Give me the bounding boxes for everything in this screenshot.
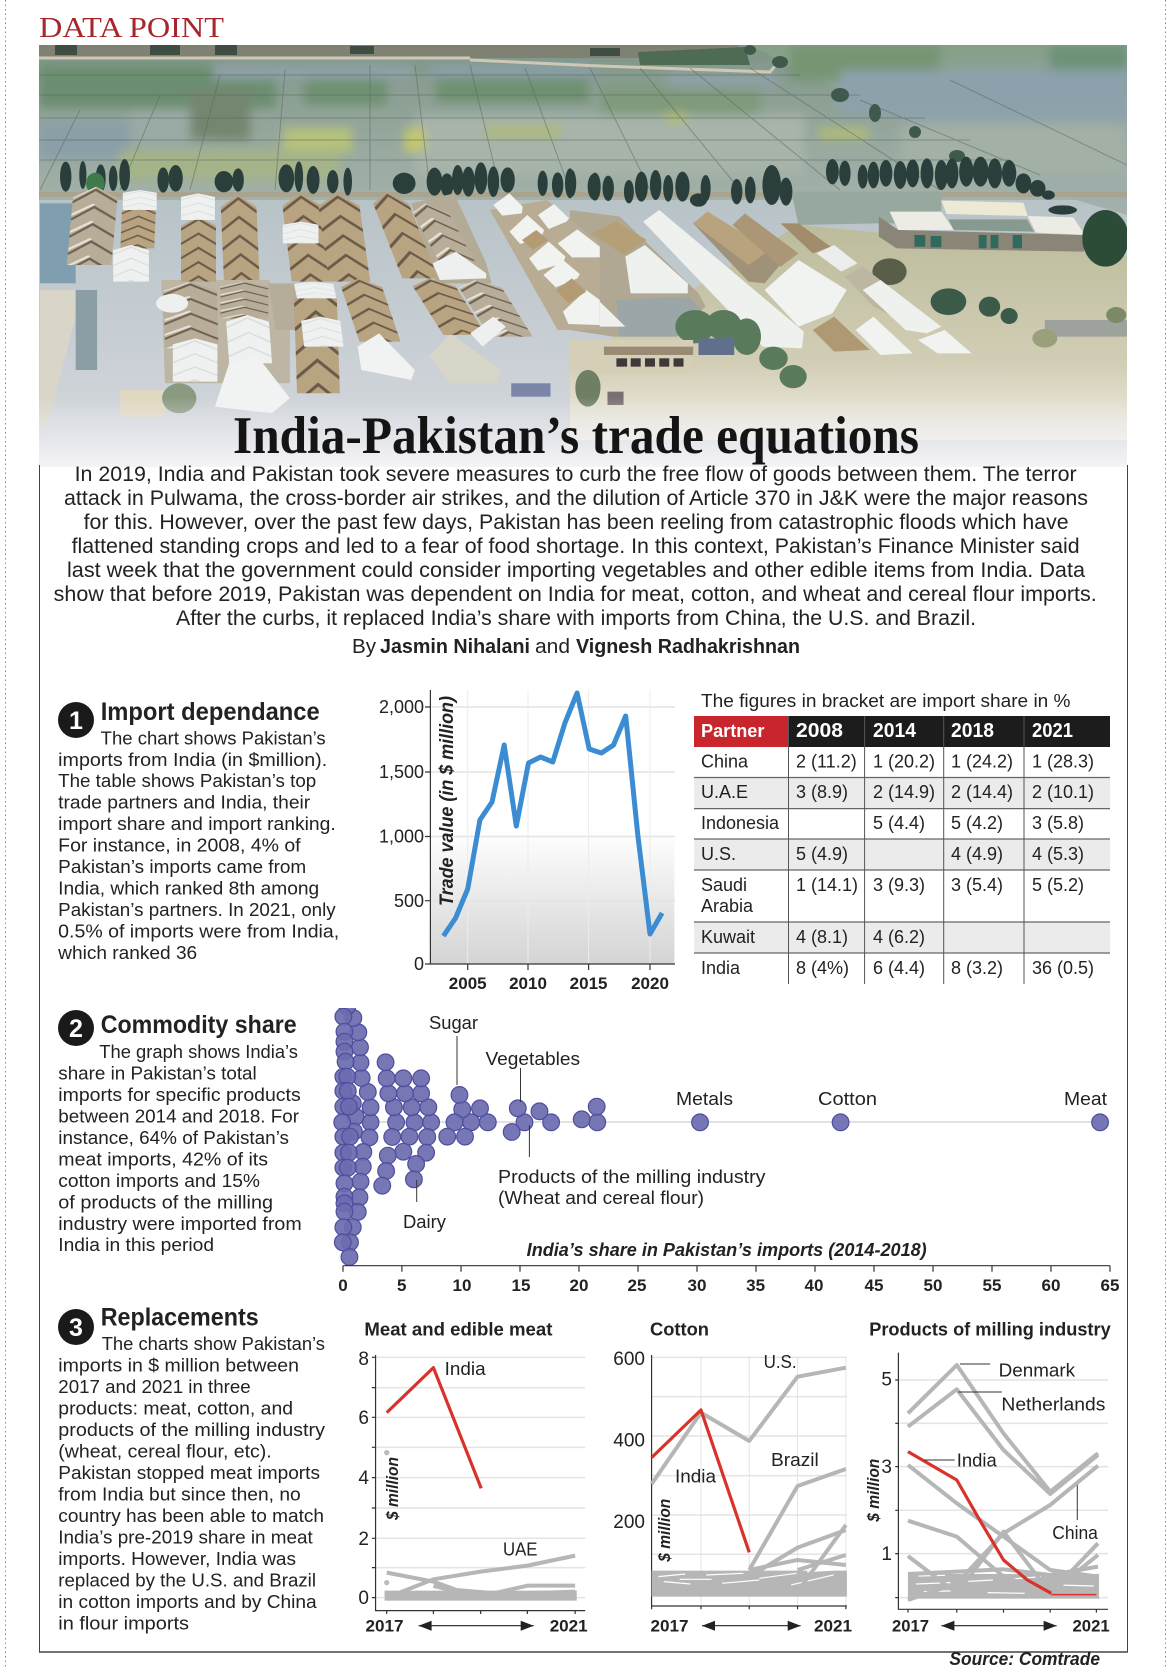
series labels: Netherlands (1001, 1394, 1105, 1415)
body text: imports from India (in $million). (58, 749, 327, 770)
body text: between 2014 and 2018. For (58, 1106, 299, 1126)
line chart: Pakistan's imports from India (379, 690, 675, 993)
leader lines (417, 1036, 529, 1202)
table rows: 5 (4.9) (796, 844, 848, 864)
number badge 2 (58, 1010, 94, 1046)
table rows (701, 752, 1094, 978)
table rows: 3 (9.3) (873, 875, 925, 895)
x axis labels: 30 (688, 1276, 706, 1295)
y axis labels (613, 1349, 645, 1533)
body text: industry were imported from (58, 1213, 302, 1234)
frame around article (39, 465, 1128, 1652)
data line (443, 693, 662, 936)
body text: The charts show Pakistan’s (102, 1333, 325, 1354)
body text: products: meat, cotton, and (58, 1398, 293, 1418)
x axis labels: 65 (1101, 1276, 1119, 1295)
intro paragraph: attack in Pulwama, the cross-border air strikes, and the dilution of Article 370 in J&K were the major reasons (64, 487, 1088, 510)
series labels: India (957, 1450, 998, 1471)
x axis labels: 0 (338, 1276, 348, 1295)
body text: imports for specific products (58, 1084, 301, 1105)
series labels (957, 1360, 1105, 1543)
y axis labels: 200 (613, 1512, 645, 1533)
callouts: Products of the milling industry (498, 1166, 766, 1187)
callouts: Sugar (429, 1012, 478, 1033)
series labels: China (1052, 1522, 1099, 1543)
table rows: 4 (5.3) (1032, 844, 1084, 864)
heading: Replacements: Replacements (101, 1304, 259, 1332)
plot lines (372, 1355, 585, 1614)
byline: By (352, 636, 376, 658)
y axis labels: 1 (881, 1544, 892, 1565)
body text: 0.5% of imports were from India, (58, 920, 339, 942)
x axis labels: 10 (453, 1276, 471, 1295)
year axis with arrow: 2021 (550, 1617, 588, 1636)
table rows: U.A.E (701, 782, 748, 802)
table rows: 2 (10.1) (1032, 782, 1094, 802)
x axis labels: 15 (512, 1276, 530, 1295)
table rows: 3 (8.9) (796, 782, 848, 802)
line chart: Meat and edible meat (358, 1319, 588, 1636)
callouts: Dairy (403, 1211, 447, 1232)
body text: Pakistan’s partners. In 2021, only (58, 899, 336, 920)
year axis with arrow: 2021 (814, 1617, 852, 1636)
callouts: Metals (676, 1088, 733, 1109)
byline (352, 636, 800, 658)
table rows: 3 (5.4) (951, 875, 1003, 895)
body text: imports. However, India was (58, 1548, 296, 1569)
body text (57, 727, 339, 963)
number badge 1: 1 (69, 707, 83, 735)
year axis with arrow: 2017 (366, 1617, 404, 1636)
table rows: 5 (5.2) (1032, 875, 1084, 895)
hero photo: flooded salt works aerial view (39, 45, 1130, 467)
body text: from India but since then, no (58, 1484, 301, 1504)
y axis labels (881, 1370, 892, 1565)
x axis labels: 45 (865, 1276, 883, 1295)
heading: Commodity share: Commodity share (101, 1011, 297, 1039)
chart title: India’s share in Pakistan’s imports (2014-2018) (527, 1240, 927, 1260)
body text: replaced by the U.S. and Brazil (58, 1570, 316, 1590)
salt stacks (570, 210, 706, 337)
line chart: Cotton (613, 1319, 852, 1636)
body text: Pakistan stopped meat imports (58, 1462, 320, 1483)
callouts: Cotton (818, 1088, 877, 1109)
y axis labels: 6 (358, 1408, 369, 1429)
table rows: 5 (4.4) (873, 813, 925, 833)
body text (58, 1333, 326, 1634)
year axis with arrow (366, 1617, 588, 1636)
y axis labels: 4 (358, 1468, 369, 1489)
body text (58, 1041, 302, 1255)
number badge 3 (58, 1309, 94, 1345)
table rows: 2 (11.2) (796, 752, 857, 772)
body text: India, which ranked 8th among (58, 878, 319, 899)
x axis labels: 2005 (449, 974, 487, 993)
table header: 2021 (1032, 720, 1073, 742)
table header: 2008 (796, 720, 843, 742)
number badge 3: 3 (69, 1314, 83, 1342)
body text: products of the milling industry (58, 1419, 326, 1440)
axis title: Trade value (in $ million) (437, 696, 458, 906)
body text: share in Pakistan’s total (58, 1062, 257, 1084)
number badge 2: 2 (69, 1015, 83, 1043)
body text: imports in $ million between (58, 1354, 299, 1376)
series labels: U.S. (764, 1351, 797, 1372)
body text: The table shows Pakistan’s top (58, 770, 316, 791)
axis title: $ million (864, 1459, 883, 1523)
table rows: 4 (6.2) (873, 927, 925, 947)
table rows: 36 (0.5) (1032, 958, 1094, 978)
year axis with arrow (892, 1617, 1110, 1636)
plot lines (652, 1355, 847, 1609)
y axis labels: 2 (358, 1529, 369, 1550)
byline: Jasmin Nihalani (380, 636, 530, 658)
body text: Pakistan’s imports came from (58, 856, 306, 877)
body text: import share and import ranking. (58, 813, 336, 834)
section 2 text: Commodity share (58, 1010, 302, 1255)
x axis labels: 40 (805, 1276, 823, 1295)
series labels: Brazil (771, 1449, 819, 1470)
x axis labels: 2010 (509, 974, 547, 993)
dots (334, 998, 1108, 1265)
x axis labels (338, 1276, 1119, 1295)
x axis labels: 5 (397, 1276, 406, 1295)
table rows: Kuwait (701, 927, 755, 947)
lower building (570, 340, 694, 363)
year axis with arrow (650, 1617, 852, 1636)
series labels (675, 1351, 819, 1487)
table header: 2018 (951, 720, 994, 742)
y axis labels: 0 (414, 954, 424, 974)
x axis labels: 55 (983, 1276, 1001, 1295)
table rows: 4 (4.9) (951, 844, 1003, 864)
chart title: Products of milling industry (869, 1319, 1111, 1340)
intro paragraph: In 2019, India and Pakistan took severe measures to curb the free flow of goods between them. The terror (75, 463, 1077, 486)
y axis labels: 5 (881, 1370, 892, 1390)
x axis labels: 35 (746, 1276, 765, 1295)
x axis (343, 1266, 1110, 1272)
year axis with arrow: 2021 (1072, 1617, 1110, 1636)
table rows: India (701, 958, 741, 978)
chart title: Meat and edible meat (364, 1319, 552, 1340)
number badge 1 (58, 702, 94, 738)
callouts: (Wheat and cereal flour) (498, 1187, 704, 1208)
y axis labels: 1,000 (379, 826, 424, 846)
section label: DATA POINT: DATA POINT (39, 12, 224, 44)
table rows: 8 (4%) (796, 958, 849, 978)
table rows: 5 (4.2) (951, 813, 1003, 833)
x axis labels: 2020 (631, 974, 669, 993)
table rows: Saudi (701, 875, 747, 895)
hedge along field (744, 45, 965, 162)
table rows: Indonesia (701, 813, 780, 833)
line chart: Products of milling industry (864, 1319, 1111, 1636)
callouts (403, 1012, 1107, 1232)
x axis labels: 20 (570, 1276, 588, 1295)
x axis labels: 50 (924, 1276, 942, 1295)
body text: The graph shows India’s (99, 1041, 298, 1062)
intro paragraph: last week that the government could consider importing vegetables and other edible items from India. Data (67, 559, 1085, 582)
body text: of products of the milling (58, 1192, 273, 1212)
intro paragraph (54, 463, 1097, 630)
y axis labels (358, 1349, 369, 1609)
axis title: $ million (383, 1457, 402, 1521)
x axis labels (449, 974, 669, 993)
intro paragraph: show that before 2019, Pakistan was dependent on India for meat, cotton, and wheat and cereal flour imports. (54, 583, 1097, 606)
table rows: 8 (3.2) (951, 958, 1003, 978)
year axis with arrow: 2017 (892, 1617, 929, 1636)
table: top partners (694, 690, 1110, 984)
y axis labels: 0 (358, 1588, 369, 1609)
series labels: India (675, 1466, 717, 1487)
table rows: Arabia (701, 896, 754, 916)
building (879, 217, 1084, 252)
source note: Source: Comtrade (949, 1649, 1100, 1669)
table rows: 2 (14.4) (951, 782, 1013, 802)
rubble bases around stacks (161, 280, 290, 383)
body text: country has been able to match (58, 1505, 324, 1526)
body text: cotton imports and 15% (58, 1170, 260, 1191)
year axis with arrow: 2017 (650, 1617, 688, 1636)
table rows: 4 (8.1) (796, 927, 848, 947)
section 1 text: Import dependance (57, 698, 339, 963)
body text: which ranked 36 (57, 942, 197, 963)
y axis labels: 8 (358, 1349, 369, 1370)
body text: instance, 64% of Pakistan’s (58, 1127, 289, 1148)
intro paragraph: for this. However, over the past few days, Pakistan has been reeling from catastrophic floods which have (84, 511, 1069, 534)
chart title: Cotton (650, 1319, 709, 1340)
series labels (445, 1358, 538, 1560)
table header: Partner (701, 721, 764, 741)
callouts: Vegetables (486, 1048, 580, 1069)
body text: (wheat, cereal flour, etc). (58, 1440, 272, 1462)
y axis labels: 3 (881, 1457, 892, 1478)
intro paragraph: After the curbs, it replaced India’s share with imports from China, the U.S. and Brazil. (176, 607, 976, 630)
table header: 2014 (873, 720, 917, 742)
table rows: 3 (5.8) (1032, 813, 1084, 833)
body text: in cotton imports and by China (58, 1591, 317, 1612)
body text: in flour imports (58, 1612, 189, 1634)
axis title: $ million (655, 1499, 674, 1563)
table rows: 1 (20.2) (873, 752, 935, 772)
body text: India in this period (58, 1234, 214, 1255)
body text: 2017 and 2021 in three (58, 1376, 251, 1397)
beeswarm chart: India's share in Pakistan's imports (334, 998, 1119, 1295)
y axis labels: 2,000 (379, 697, 424, 717)
table header (701, 720, 1073, 742)
table rows: 1 (14.1) (796, 875, 858, 895)
series labels: Denmark (999, 1360, 1076, 1381)
callouts: Meat (1064, 1088, 1107, 1109)
y axis labels: 500 (394, 891, 424, 911)
title: India-Pakistan’s trade equations (233, 407, 919, 465)
body text: meat imports, 42% of its (58, 1148, 268, 1170)
byline: and (535, 636, 570, 658)
y axis labels: 400 (613, 1430, 645, 1452)
series labels: India (445, 1358, 486, 1379)
table rows: 1 (28.3) (1032, 752, 1094, 772)
table note: The figures in bracket are import share in % (701, 690, 1070, 711)
intro paragraph: flattened standing crops and led to a fear of food shortage. In this context, Pakistan’s Finance Minister said (72, 535, 1080, 558)
y axis labels: 600 (613, 1349, 645, 1370)
series labels: UAE (503, 1539, 538, 1560)
table rows: China (701, 752, 749, 772)
section 3 text: Replacements (58, 1304, 326, 1634)
salt stacks (67, 187, 119, 265)
heading: Import dependance: Import dependance (101, 698, 320, 726)
y axis labels: 1,500 (379, 762, 424, 782)
table rows: 2 (14.9) (873, 782, 935, 802)
y axis labels (379, 697, 424, 974)
body text: trade partners and India, their (58, 792, 310, 813)
body text: For instance, in 2008, 4% of (58, 835, 302, 856)
body text: The chart shows Pakistan’s (101, 727, 326, 748)
table rows: 6 (4.4) (873, 958, 925, 978)
x axis labels: 25 (628, 1276, 646, 1295)
x axis labels: 2015 (570, 974, 608, 993)
byline: Vignesh Radhakrishnan (576, 636, 800, 658)
table rows: U.S. (701, 844, 736, 864)
table rows: 1 (24.2) (951, 752, 1013, 772)
body text: India’s pre-2019 share in meat (58, 1526, 313, 1548)
x axis labels: 60 (1042, 1276, 1060, 1295)
plot lines (895, 1353, 1108, 1613)
